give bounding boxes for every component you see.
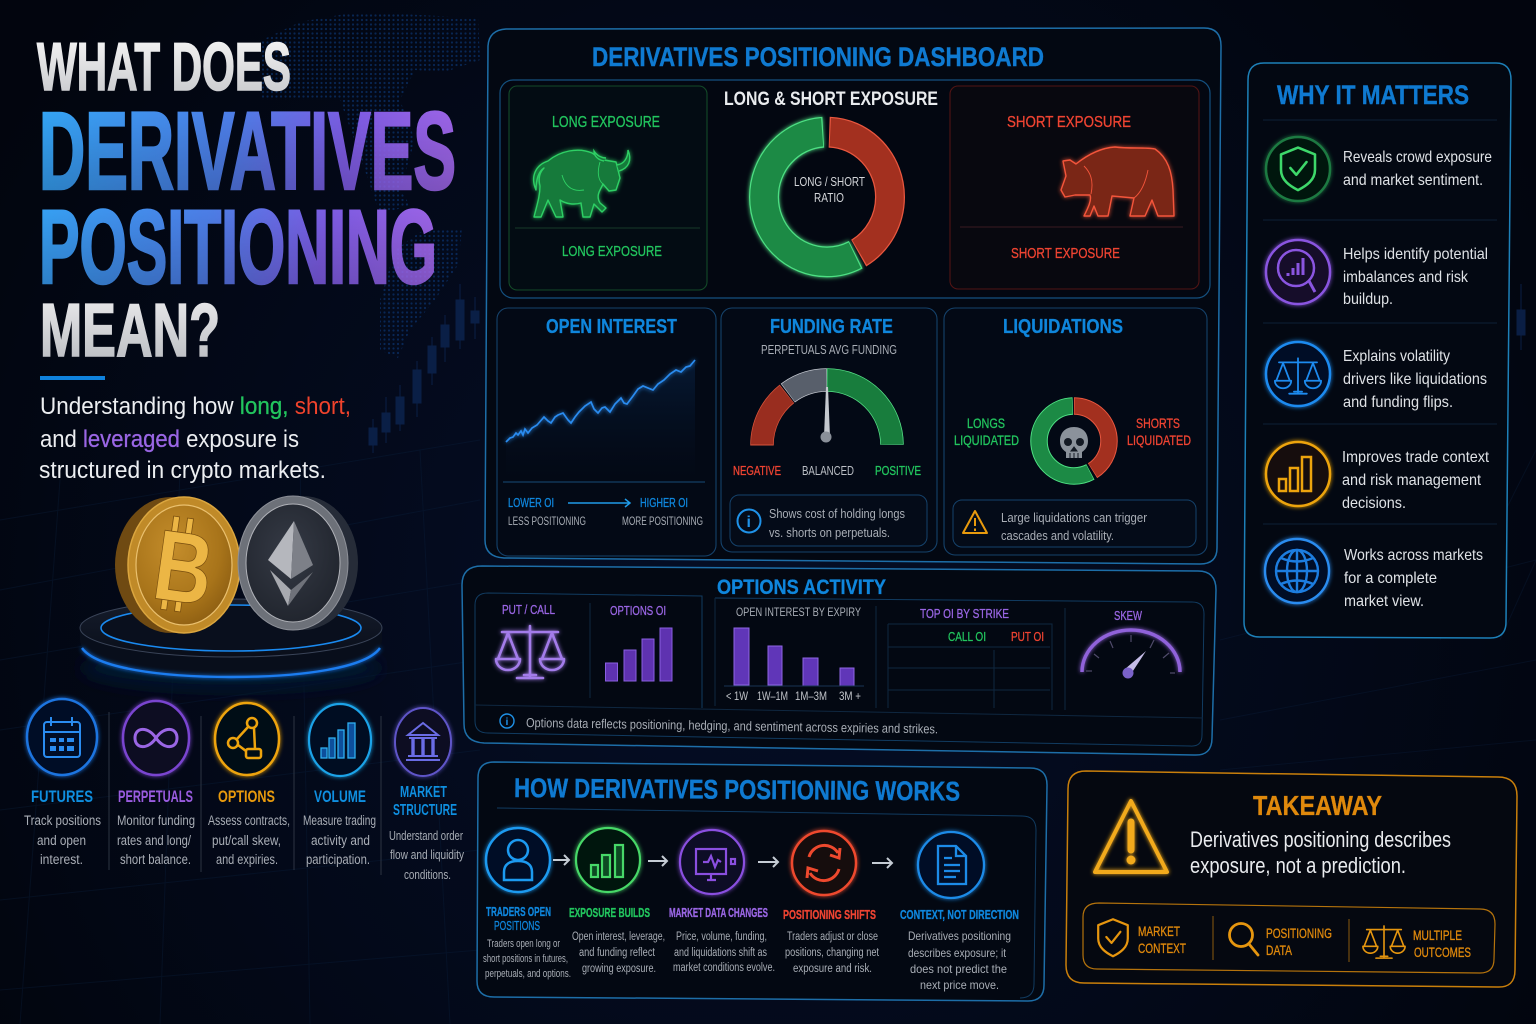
panel: liquidations: [944, 308, 1207, 555]
panel: options activity: SKEW: [1114, 608, 1143, 623]
panel: takeaway: [1066, 771, 1517, 987]
icon: put call scales: [496, 626, 564, 678]
item: trade context: and risk management: [1342, 472, 1482, 489]
panel: options activity: PUT / CALL: [502, 602, 555, 617]
panel: open interest: MORE POSITIONING: [622, 516, 703, 528]
panel: long exposure: [509, 86, 707, 290]
column: options: [208, 703, 290, 867]
donut chart: long short ratio: [764, 132, 890, 262]
panel: options activity: [462, 566, 1216, 755]
item: volatility drivers: and funding flips.: [1343, 394, 1453, 411]
subtitle: Understanding how long, short,: [40, 393, 351, 420]
coin platform: [80, 599, 382, 690]
icon: infinity: [123, 701, 189, 775]
panel: open interest: OPEN INTEREST: [546, 316, 677, 338]
panel: short exposure: SHORT EXPOSURE: [1007, 114, 1131, 131]
icon: refresh arrows: [792, 831, 856, 895]
step 5: context, not direction: CONTEXT, NOT DIRECTION: [900, 908, 1019, 922]
step 3: market data changes: [669, 830, 775, 974]
arrow: lower to higher: [568, 499, 630, 507]
column: futures: interest.: [40, 852, 83, 867]
item: imbalances: Helps identify potential: [1343, 246, 1488, 263]
callout: options note: i: [506, 716, 508, 728]
subtitle: structured in crypto markets.: [39, 457, 326, 484]
item: imbalances: buildup.: [1343, 291, 1393, 308]
step 5: context, not direction: next price move.: [920, 978, 999, 992]
icon: scales: [1363, 926, 1405, 958]
item: crowd exposure: and market sentiment.: [1343, 172, 1483, 189]
column: perpetuals: PERPETUALS: [118, 788, 193, 806]
step 1: traders open positions: POSITIONS: [494, 919, 540, 933]
icon: magnifier chart: [1266, 240, 1330, 304]
column: volume: Measure trading: [303, 813, 376, 828]
item: across markets: Works across markets: [1344, 547, 1483, 564]
panel: funding rate: PERPETUALS AVG FUNDING: [761, 343, 897, 357]
panel: takeaway: Derivatives positioning describes: [1190, 827, 1451, 852]
heading: dashboard: DERIVATIVES POSITIONING DASHBOARD: [592, 42, 1044, 72]
arrow: [758, 857, 778, 867]
column: volume: [303, 704, 376, 867]
panel: long exposure: LONG EXPOSURE: [562, 243, 662, 260]
step 5: context, not direction: does not predict the: [910, 962, 1007, 976]
icon: bitcoin coin: B: [147, 508, 220, 627]
callout: funding note: vs. shorts on perpetuals.: [769, 526, 890, 540]
panel: funding rate: [721, 308, 937, 552]
panel: takeaway: CONTEXT: [1138, 941, 1186, 956]
item: crowd exposure: Reveals crowd exposure: [1343, 149, 1492, 166]
callout: funding note: i: [746, 514, 751, 531]
accent rule: [40, 376, 105, 380]
step 3: market data changes: MARKET DATA CHANGES: [669, 906, 768, 920]
icon: scales: [1266, 342, 1330, 406]
panel: liquidations: SHORTS: [1136, 416, 1180, 431]
bar chart: open interest by expiry: 1M–3M: [795, 689, 827, 703]
panel: how derivatives positioning works: HOW DERIVATIVES POSITIONING WORKS: [514, 773, 960, 807]
icon: shield: [1098, 919, 1128, 956]
callout: options note: Options data reflects positioning, hedging, and sentiment across expiries and strikes.: [526, 715, 938, 736]
icon: calendar: [27, 699, 97, 775]
panel: takeaway: MARKET: [1138, 924, 1180, 939]
main title: MEAN?: [40, 288, 220, 372]
column: perpetuals: [117, 701, 195, 867]
item: volatility drivers: drivers like liquidations: [1343, 371, 1487, 388]
column: market structure: flow and liquidity: [390, 847, 464, 862]
icon: skull: [1060, 427, 1088, 458]
panel: options activity: OPEN INTEREST BY EXPIRY: [736, 605, 861, 619]
step 4: positioning shifts: POSITIONING SHIFTS: [783, 908, 876, 922]
step 5: context, not direction: describes exposure; it: [908, 946, 1007, 960]
item: imbalances: imbalances and risk: [1343, 269, 1469, 286]
step 3: market data changes: and liquidations shift as: [674, 947, 767, 959]
column: market structure: conditions.: [404, 867, 451, 882]
panel: takeaway: TAKEAWAY: [1253, 790, 1382, 821]
panel: takeaway: DATA: [1266, 943, 1292, 958]
column: perpetuals: Monitor funding: [117, 813, 195, 828]
column: futures: and open: [37, 833, 86, 848]
step 2: exposure builds: EXPOSURE BUILDS: [569, 906, 650, 920]
panel: takeaway: POSITIONING: [1266, 926, 1332, 941]
candlestick backdrop: [369, 284, 1525, 453]
callout: liquidation warning: Large liquidations can trigger: [1001, 511, 1147, 525]
panel: open interest: [497, 308, 716, 556]
donut chart: long short ratio: LONG / SHORT: [794, 174, 865, 189]
item: trade context: [1266, 442, 1489, 512]
column: options: put/call skew,: [212, 833, 281, 848]
column: options: Assess contracts,: [208, 813, 290, 828]
arrow: [872, 858, 892, 868]
panel: open interest: LOWER OI: [508, 496, 554, 510]
step 5: context, not direction: Derivatives positioning: [908, 929, 1011, 943]
panel: funding rate: BALANCED: [802, 463, 854, 478]
panel: long exposure: LONG EXPOSURE: [552, 114, 660, 131]
panel: takeaway: MULTIPLE: [1413, 928, 1462, 943]
step 4: positioning shifts: Traders adjust or close: [787, 931, 878, 943]
gauge: skew: [1082, 630, 1180, 678]
icon: globe: [1265, 539, 1329, 603]
step 2: exposure builds: growing exposure.: [582, 963, 656, 975]
main title: DERIVATIVES: [39, 90, 456, 213]
item: volatility drivers: Explains volatility: [1343, 348, 1450, 365]
panel: funding rate: POSITIVE: [875, 463, 921, 478]
step 3: market data changes: Price, volume, funding,: [676, 931, 767, 943]
column: volume: VOLUME: [314, 788, 366, 806]
column: options: and expiries.: [216, 852, 278, 867]
column: market structure: STRUCTURE: [393, 802, 457, 819]
icon: bull: [534, 150, 630, 217]
item: imbalances: [1266, 240, 1488, 308]
column: perpetuals: short balance.: [120, 852, 191, 867]
panel: how derivatives positioning works: [477, 762, 1047, 1001]
bar chart: open interest by expiry: 1W–1M: [757, 689, 788, 703]
step 2: exposure builds: Open interest, leverage,: [572, 931, 665, 943]
step 4: positioning shifts: [783, 831, 880, 975]
icon: document: [918, 832, 984, 898]
icon: ethereum coin: [238, 496, 358, 630]
callout: liquidation warning: [953, 500, 1196, 547]
main title: POSITIONING: [39, 189, 437, 306]
item: across markets: for a complete: [1344, 570, 1437, 587]
panel: funding rate: FUNDING RATE: [770, 316, 893, 338]
item: across markets: [1265, 539, 1483, 610]
heading: long and short exposure: LONG & SHORT EXPOSURE: [724, 89, 938, 110]
main title: WHAT DOES: [37, 29, 291, 105]
item: trade context: decisions.: [1342, 495, 1406, 512]
donut chart: long short ratio: RATIO: [814, 190, 844, 205]
step 1: traders open positions: [483, 828, 571, 980]
callout: funding note: Shows cost of holding longs: [769, 507, 905, 521]
panel: liquidations: LIQUIDATED: [1127, 433, 1191, 448]
icon: shield check: [1266, 137, 1330, 201]
main title: [37, 29, 456, 372]
column: market structure: Understand order: [389, 828, 463, 843]
panel: takeaway: OUTCOMES: [1414, 945, 1471, 960]
step 3: market data changes: market conditions evolve.: [673, 962, 775, 974]
step 2: exposure builds: [569, 828, 665, 975]
item: trade context: Improves trade context: [1342, 449, 1489, 466]
column: futures: FUTURES: [31, 787, 93, 806]
step 5: context, not direction: [900, 832, 1019, 992]
panel: liquidations: LONGS: [967, 416, 1005, 431]
column: volume: activity and: [311, 833, 370, 848]
item: volatility drivers: [1266, 342, 1487, 411]
icon: bars: [1266, 442, 1330, 506]
panel: why it matters: [1244, 63, 1511, 638]
icon: growing bars: [576, 828, 640, 892]
item: crowd exposure: [1266, 137, 1492, 201]
icon: bitcoin coin: [115, 497, 240, 633]
column: options: OPTIONS: [218, 788, 275, 806]
panel: open interest: HIGHER OI: [640, 496, 688, 510]
dotted world map: [260, 14, 480, 358]
panel: short exposure: [950, 86, 1199, 289]
step 1: traders open positions: short positions in futures,: [483, 953, 568, 965]
step 1: traders open positions: TRADERS OPEN: [486, 905, 551, 919]
bar chart: open interest by expiry: [724, 628, 864, 703]
column: market structure: MARKET: [400, 784, 447, 801]
column: futures: [24, 699, 101, 867]
icon: data screen: [680, 830, 744, 894]
panel: derivatives positioning dashboard: [485, 28, 1221, 564]
subtitle: [39, 393, 351, 484]
step 4: positioning shifts: positions, changing net: [785, 947, 880, 959]
panel: liquidations: LIQUIDATIONS: [1003, 316, 1123, 338]
panel: takeaway: exposure, not a prediction.: [1190, 853, 1406, 878]
table: top oi by strike: PUT OI: [1011, 629, 1044, 644]
bar chart: open interest by expiry: < 1W: [726, 689, 749, 703]
panel: options activity: OPTIONS ACTIVITY: [717, 576, 886, 599]
gauge: funding: [762, 380, 892, 510]
arrow: [648, 856, 667, 866]
icon: option network: [215, 703, 279, 775]
table: top oi by strike: CALL OI: [948, 629, 986, 644]
column: futures: Track positions: [24, 813, 101, 828]
subtitle: and leveraged exposure is: [40, 426, 299, 453]
panel: options activity: OPTIONS OI: [610, 603, 666, 618]
icon: bear: [1061, 147, 1174, 216]
line chart: rising open interest: [506, 360, 695, 478]
step 2: exposure builds: and funding reflect: [579, 947, 656, 959]
panel: why it matters: WHY IT MATTERS: [1277, 80, 1469, 110]
panel: liquidations: LIQUIDATED: [954, 433, 1019, 448]
donut chart: liquidations: [1039, 406, 1109, 476]
column: market structure: [389, 708, 464, 882]
callout: funding note: [730, 495, 927, 546]
icon: trader: [486, 828, 550, 892]
icon: magnifier: [1230, 924, 1258, 955]
step 1: traders open positions: Traders open long or: [487, 938, 560, 950]
icon: volume bars: [309, 704, 371, 776]
column: perpetuals: rates and long/: [117, 833, 191, 848]
panel: short exposure: SHORT EXPOSURE: [1011, 245, 1120, 262]
table: top oi by strike: [888, 624, 1052, 710]
bar chart: options oi: [606, 628, 672, 681]
panel: open interest: LESS POSITIONING: [508, 516, 586, 528]
panel: funding rate: NEGATIVE: [733, 463, 781, 478]
bar chart: open interest by expiry: 3M +: [839, 689, 861, 703]
icon: warning triangle: [1095, 801, 1167, 872]
item: across markets: market view.: [1344, 593, 1424, 610]
column: volume: participation.: [306, 852, 370, 867]
icon: bank building: [395, 708, 451, 776]
arrow: [553, 855, 569, 865]
callout: liquidation warning: cascades and volatility.: [1001, 529, 1114, 543]
step 4: positioning shifts: exposure and risk.: [793, 963, 872, 975]
step 1: traders open positions: perpetuals, and options.: [485, 968, 571, 980]
panel: options activity: TOP OI BY STRIKE: [920, 606, 1009, 621]
